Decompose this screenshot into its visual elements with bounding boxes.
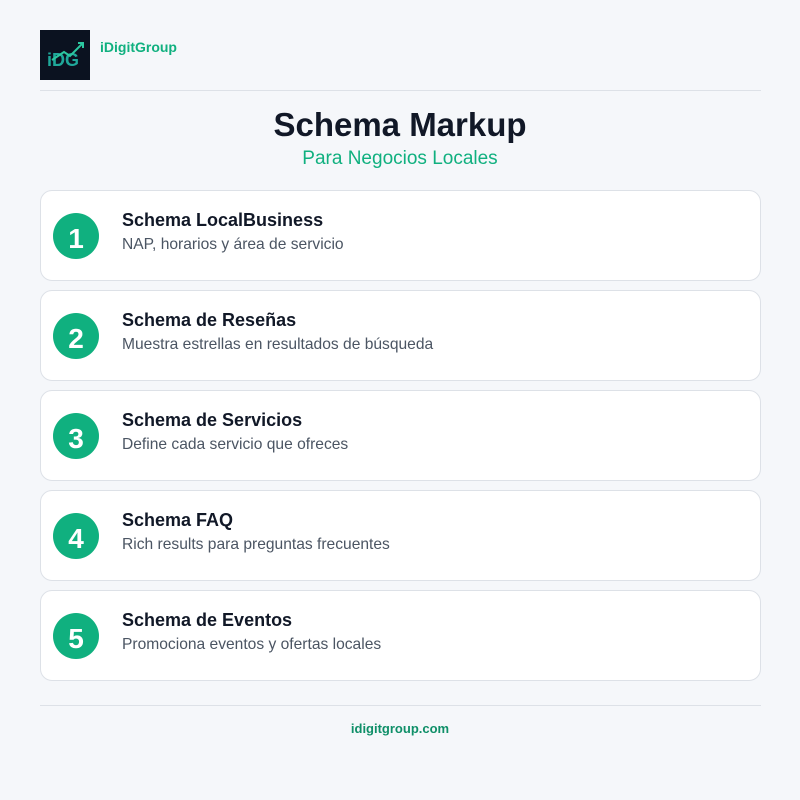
card 3: Schema de Servicios — [122, 410, 302, 430]
card 2 — [40, 290, 761, 381]
subtitle: Para Negocios Locales — [302, 148, 498, 169]
logo — [40, 30, 90, 80]
card 5: Promociona eventos y ofertas locales — [122, 636, 381, 653]
card 3 — [40, 390, 761, 481]
card 2: 2 — [68, 323, 84, 354]
card 1: Schema LocalBusiness — [122, 210, 323, 230]
card 5 — [40, 590, 761, 681]
card 1: NAP, horarios y área de servicio — [122, 236, 344, 253]
card 4: Schema FAQ — [122, 510, 233, 530]
card 4 — [40, 490, 761, 581]
card 4: 4 — [68, 523, 84, 554]
card 5: 5 — [68, 623, 84, 654]
card 2: Muestra estrellas en resultados de búsqueda — [122, 336, 433, 353]
card 5: Schema de Eventos — [122, 610, 292, 630]
logo: iDG — [47, 50, 79, 70]
card 1 — [40, 190, 761, 281]
card 2: Schema de Reseñas — [122, 310, 296, 330]
title: Schema Markup — [273, 106, 527, 143]
card 1: 1 — [68, 223, 84, 254]
card 3: Define cada servicio que ofreces — [122, 436, 348, 453]
card 3: 3 — [68, 423, 84, 454]
footer url: idigitgroup.com — [351, 721, 449, 736]
card 4: Rich results para preguntas frecuentes — [122, 536, 390, 553]
brand name: iDigitGroup — [100, 39, 177, 55]
